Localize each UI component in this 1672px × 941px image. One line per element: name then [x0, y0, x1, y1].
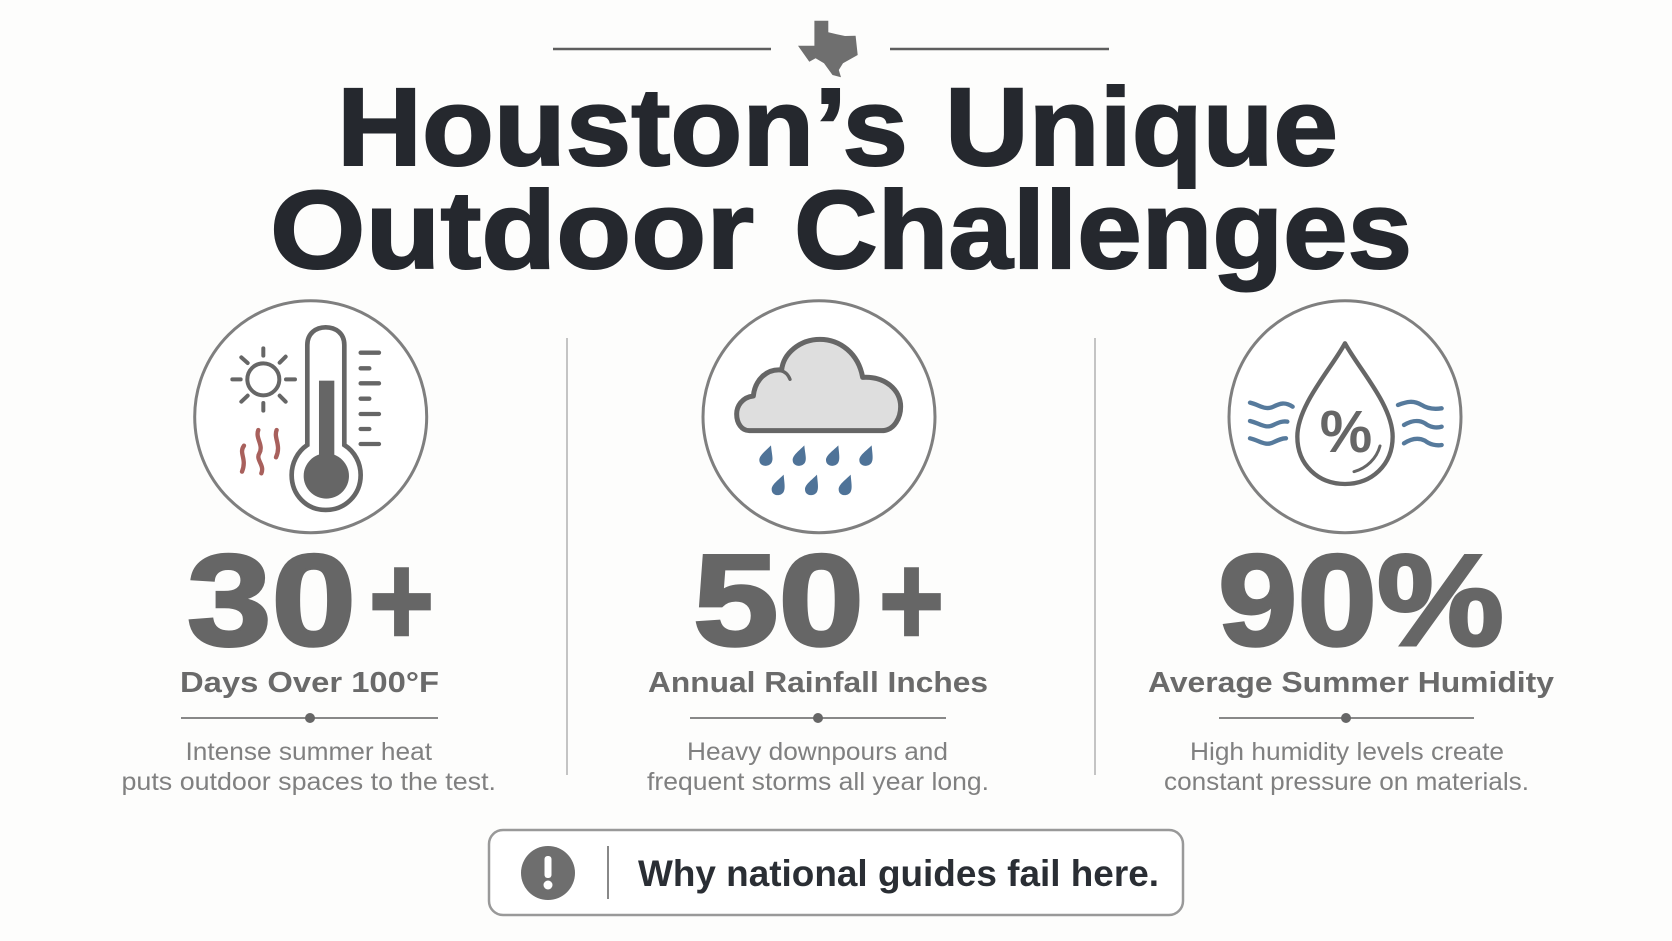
description: Intense summer heat [186, 738, 432, 766]
title [270, 66, 1412, 292]
divider with dot [181, 713, 438, 723]
description: puts outdoor spaces to the test. [122, 768, 496, 796]
icon: thermometer and sun [195, 301, 427, 533]
stat: 30+ [187, 527, 434, 673]
icon: exclamation [521, 846, 575, 900]
description: constant pressure on materials. [1164, 768, 1529, 796]
label: days over 100F: Days Over 100°F [180, 667, 439, 699]
title: Houston’s [337, 66, 908, 189]
stat: 90%: 90% [1218, 527, 1504, 673]
panel: rainfall [647, 301, 989, 796]
divider with dot [1219, 713, 1474, 723]
icon: rain cloud [703, 301, 935, 533]
description: High humidity levels create [1190, 738, 1504, 766]
icon: humidity drop and waves [1229, 301, 1461, 533]
callout [489, 830, 1183, 915]
callout text: Why national guides fail here. [638, 853, 1159, 894]
panel: humidity [1148, 301, 1554, 796]
title: Challenges [794, 169, 1412, 292]
label: average summer humidity: Average Summer Humidity [1148, 667, 1554, 699]
panel: heat [122, 301, 496, 796]
stat: 50+ [693, 527, 944, 673]
description [647, 738, 989, 796]
description [1164, 738, 1529, 796]
title: Outdoor [270, 169, 754, 292]
title: Unique [945, 66, 1338, 189]
description [122, 738, 496, 796]
stat: 50+: 50 [693, 527, 864, 673]
stat: 30+: + [369, 527, 434, 673]
icon: Texas silhouette [798, 21, 858, 77]
header ornament: lines and Texas [553, 21, 1109, 77]
icon: humidity drop and waves: % [1320, 399, 1372, 465]
stat: 50+: + [879, 527, 944, 673]
label: annual rainfall inches: Annual Rainfall Inches [648, 667, 988, 699]
stat: 30+: 30 [187, 527, 356, 673]
description: frequent storms all year long. [647, 768, 989, 796]
divider with dot [690, 713, 946, 723]
description: Heavy downpours and [687, 738, 948, 766]
